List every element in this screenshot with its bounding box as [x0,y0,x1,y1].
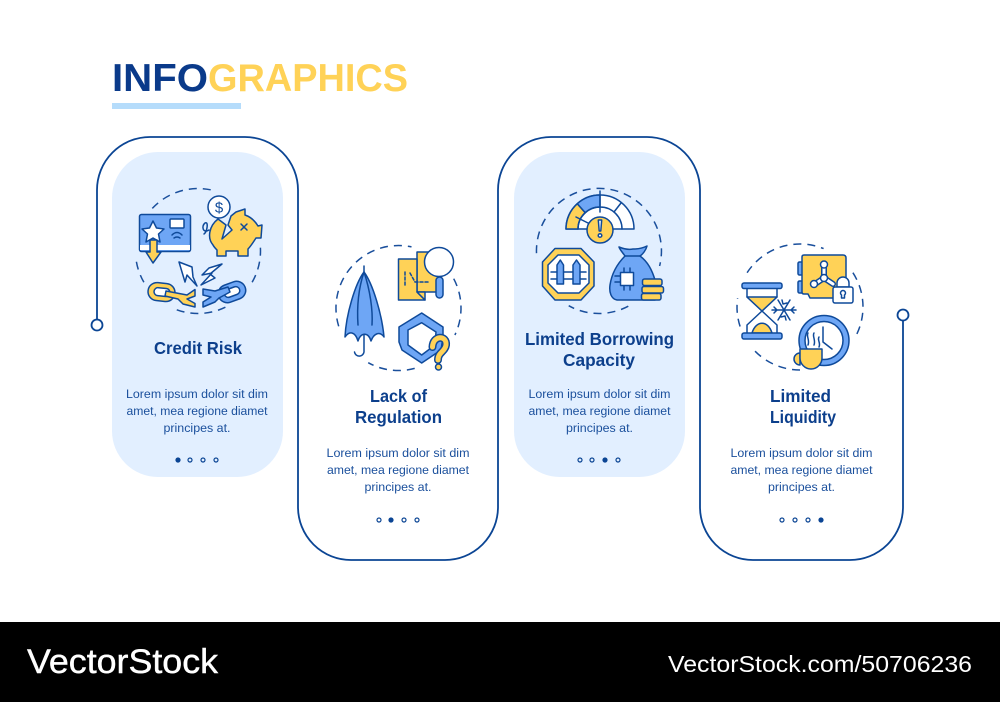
footer bar: VectorStock [27,643,219,681]
icon: broken chain [147,279,248,307]
connecting outline [92,137,908,560]
icon: broken piggy bank [203,209,262,256]
heading: credit risk: Credit Risk [154,338,242,358]
text: limited borrowing body [528,387,671,435]
icon: shield with question mark [399,313,446,370]
icon: documents and magnifier [398,248,454,300]
pagination: step 1 [176,458,218,462]
icon: umbrella [345,266,384,356]
text: lack of regulation body: Lorem ipsum dolor sit dim [326,446,470,460]
text: limited borrowing body: principes at. [566,421,633,435]
heading: lack of regulation: Regulation [355,407,442,427]
icon: lack of regulation [336,246,461,371]
heading: limited borrowing capacity: Limited Borrowing [525,329,674,349]
text: limited borrowing body: amet, mea regione diamet [528,404,671,418]
text: limited liquidity body: amet, mea regione diamet [730,463,873,477]
text: lack of regulation body [326,446,470,494]
icon: credit card [140,214,190,263]
heading: limited borrowing capacity [525,329,674,370]
text: credit risk body: principes at. [164,421,230,435]
text: credit risk body: amet, mea regione diamet [126,404,268,418]
icon: limited liquidity [737,244,863,370]
text: limited liquidity body [730,446,873,494]
panel backgrounds [112,152,685,477]
text: credit risk body: Lorem ipsum dolor sit dim [126,387,268,401]
footer bar [0,622,1000,702]
icon: safe with lock [798,255,853,303]
text: lack of regulation body: principes at. [364,480,432,494]
heading: limited liquidity: Liquidity [770,407,836,427]
icon: money bag with chip [610,246,664,300]
heading: lack of regulation [355,386,442,427]
text: limited liquidity body: Lorem ipsum dolor sit dim [730,446,872,460]
pagination: step 3 [578,458,620,462]
text: limited liquidity body: principes at. [768,480,835,494]
heading: limited liquidity: Limited [770,386,831,406]
heading: limited borrowing capacity: Capacity [563,350,635,370]
text: credit risk body [126,387,268,435]
icon: fence stop sign [542,248,594,300]
pagination: step 2 [377,518,419,522]
icon: lightning bolts [179,262,222,286]
icon: clock and coffee cup [794,316,849,369]
heading: lack of regulation: Lack of [370,386,427,406]
title: INFO [112,57,208,100]
title [112,57,408,109]
heading: limited liquidity [770,386,836,427]
icon: gauge [566,191,634,243]
title: GRAPHICS [208,57,408,100]
icon: limited borrowing capacity [536,188,664,314]
icon: credit risk [136,189,262,314]
text: lack of regulation body: amet, mea regione diamet [327,463,470,477]
icon: hourglass and snowflake [742,283,796,339]
pagination: step 4 [780,518,823,522]
icon: coin: $ [215,200,224,216]
footer bar: VectorStock.com/50706236 [668,651,972,677]
text: limited borrowing body: Lorem ipsum dolor sit dim [528,387,670,401]
